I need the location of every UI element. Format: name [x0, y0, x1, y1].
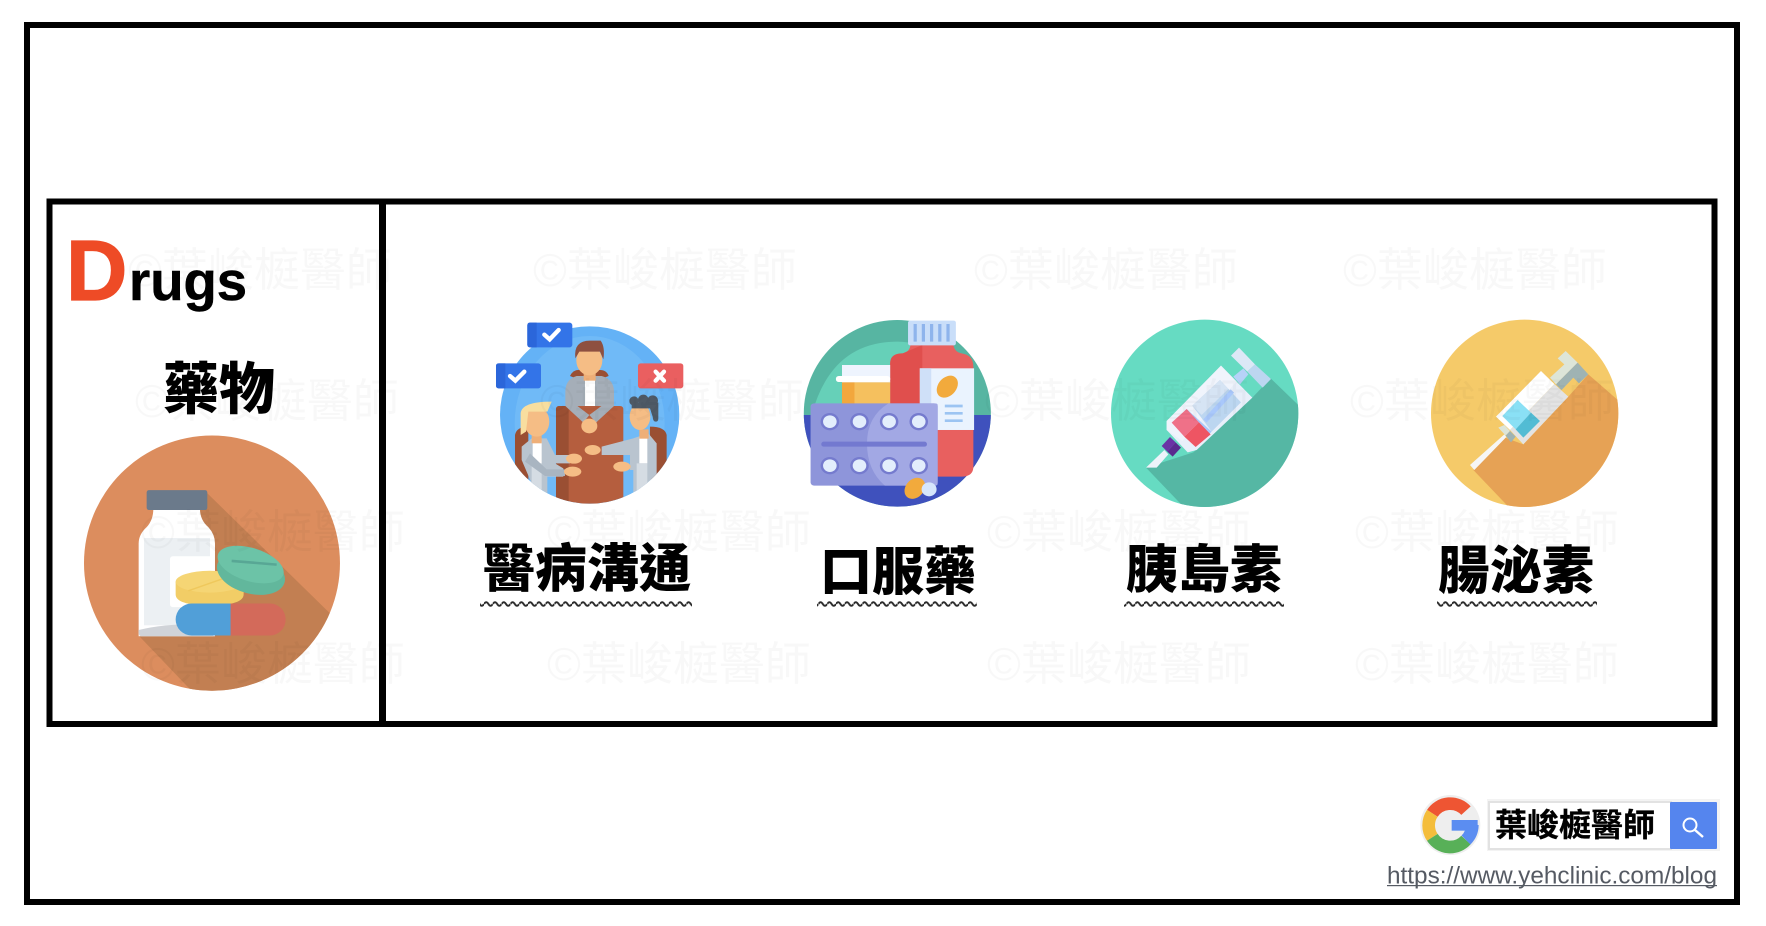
label: 口服藥: 口服藥	[820, 544, 976, 602]
icon: pill bottle and pills	[84, 436, 340, 696]
watermarks: ©葉峻榳醫師	[141, 638, 405, 690]
watermarks: ©葉峻榳醫師	[987, 506, 1251, 558]
icon: Google G logo	[1420, 795, 1480, 855]
watermarks: ©葉峻榳醫師	[533, 244, 797, 296]
heading: 藥物: 藥物	[163, 358, 275, 421]
watermarks: ©葉峻榳醫師	[1355, 638, 1619, 690]
watermarks: ©葉峻榳醫師	[547, 638, 811, 690]
search box	[1487, 799, 1720, 851]
panel: drugs table frame	[50, 201, 1714, 724]
icon: oral medicine	[803, 320, 992, 512]
watermarks: ©葉峻榳醫師	[1350, 375, 1614, 427]
watermarks: ©葉峻榳醫師	[974, 244, 1238, 296]
heading: Drugs: rugs	[129, 251, 247, 312]
website link: https://www.yehclinic.com/blog	[1387, 862, 1717, 890]
icon: incretin syringe	[1431, 320, 1622, 512]
search text: 葉峻榳醫師	[1495, 807, 1655, 843]
watermarks: ©葉峻榳醫師	[547, 506, 811, 558]
watermarks: ©葉峻榳醫師	[141, 506, 405, 558]
watermarks: ©葉峻榳醫師	[128, 244, 392, 296]
icon: doctor patient communication	[496, 323, 683, 511]
label: 胰島素: 胰島素	[1126, 542, 1282, 600]
watermarks: ©葉峻榳醫師	[540, 375, 804, 427]
icon: search button	[1670, 802, 1717, 849]
watermarks: ©葉峻榳醫師	[987, 638, 1251, 690]
label: 醫病溝通: 醫病溝通	[483, 541, 691, 599]
label: 腸泌素: 腸泌素	[1438, 543, 1594, 601]
watermarks: ©葉峻榳醫師	[1343, 244, 1607, 296]
watermarks: ©葉峻榳醫師	[1355, 506, 1619, 558]
heading: Drugs: D	[66, 224, 127, 319]
icon: insulin syringe	[1111, 320, 1302, 512]
watermarks: ©葉峻榳醫師	[135, 375, 399, 427]
watermarks	[128, 244, 1619, 690]
watermarks: ©葉峻榳醫師	[985, 375, 1249, 427]
